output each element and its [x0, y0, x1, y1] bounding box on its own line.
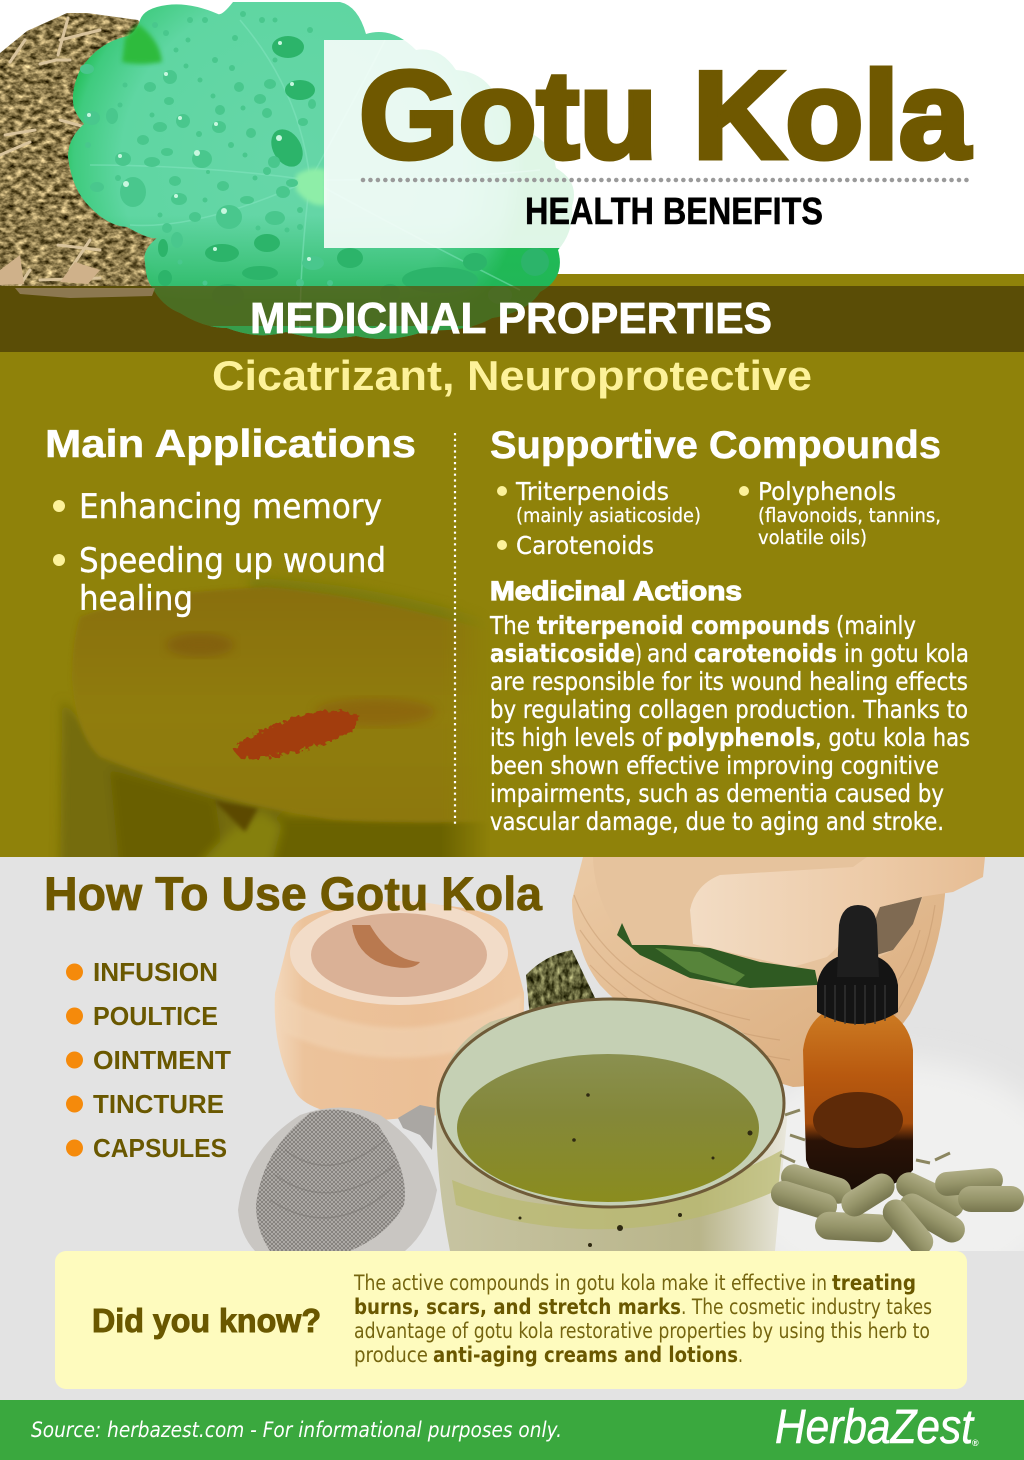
callout text: burns, scars, and stretch marks	[354, 1295, 681, 1319]
callout text: produce	[354, 1343, 428, 1367]
compound: triterpenoids: (mainly asiaticoside)	[516, 504, 701, 527]
callout text	[353, 1271, 932, 1367]
paragraph: medicinal actions: , gotu kola has	[815, 723, 970, 752]
paragraph: medicinal actions	[489, 611, 970, 836]
stick pile edge over band	[15, 288, 155, 298]
supportive compounds column	[489, 424, 970, 836]
heading: supportive compounds: Supportive Compounds	[490, 424, 941, 467]
heading: main applications: Main Applications	[45, 423, 416, 466]
callout text: .	[738, 1343, 743, 1367]
main applications column	[45, 423, 416, 619]
photo collage	[238, 857, 1024, 1300]
callout heading: Did you know?	[92, 1302, 321, 1339]
paragraph: medicinal actions: The	[489, 611, 530, 640]
form: infusion: INFUSION	[93, 957, 218, 987]
callout: did you know	[55, 1251, 967, 1389]
list item: wound healing	[53, 541, 386, 619]
form: ointment: OINTMENT	[93, 1045, 231, 1075]
image: wounded arm	[58, 577, 480, 857]
paragraph: medicinal actions: triterpenoid compounds	[537, 611, 830, 640]
footer	[0, 1400, 1024, 1460]
paragraph: medicinal actions: )	[635, 639, 642, 668]
form: poultice: POULTICE	[93, 1001, 218, 1031]
logo registered mark: ®	[972, 1438, 979, 1448]
image: tea strainer	[238, 1105, 437, 1251]
panel: how to use	[0, 857, 1024, 1400]
compound: polyphenols: (flavonoids, tannins,	[758, 504, 941, 527]
compound: polyphenols	[739, 477, 941, 549]
heading: how to use: How To Use Gotu Kola	[44, 867, 543, 920]
paragraph: medicinal actions: its high levels of	[490, 723, 663, 752]
image: jar of ointment	[275, 901, 524, 1120]
image: dried herb pile	[0, 13, 190, 300]
callout text: treating	[832, 1271, 916, 1295]
paragraph: medicinal actions: (mainly	[836, 611, 916, 640]
translucent title panel	[324, 40, 576, 248]
paragraph: medicinal actions: polyphenols	[667, 723, 815, 752]
form: capsules: CAPSULES	[93, 1133, 227, 1163]
list item: memory: Enhancing memory	[79, 487, 382, 527]
olive strip	[150, 274, 1024, 288]
compound: triterpenoids	[497, 477, 701, 527]
paragraph: medicinal actions: asiaticoside	[490, 639, 635, 668]
compound: triterpenoids: Triterpenoids	[515, 477, 669, 506]
panel: medicinal properties	[0, 286, 1024, 857]
compound: polyphenols: Polyphenols	[758, 477, 896, 506]
callout text: . The cosmetic industry takes	[681, 1295, 932, 1319]
callout text: anti-aging creams and lotions	[433, 1343, 738, 1367]
source note: Source: herbazest.com - For informational purposes only.	[31, 1418, 562, 1442]
compound: polyphenols: volatile oils)	[758, 526, 867, 549]
paragraph: medicinal actions: been shown effective improving cognitive	[490, 751, 939, 780]
list: forms of use	[66, 957, 231, 1163]
image: capsules	[771, 1164, 1024, 1251]
section heading: MEDICINAL PROPERTIES	[250, 294, 772, 343]
form: tincture: TINCTURE	[93, 1089, 224, 1119]
paragraph: medicinal actions: and	[647, 639, 688, 668]
paragraph: medicinal actions: impairments, such as dementia caused by	[490, 779, 944, 808]
paragraph: medicinal actions: vascular damage, due to aging and stroke.	[490, 807, 944, 836]
band	[0, 286, 1024, 352]
compound: carotenoids: Carotenoids	[516, 531, 654, 560]
dotted title rule	[363, 178, 967, 182]
properties subheading: Cicatrizant, Neuroprotective	[212, 352, 812, 399]
pale table glow	[775, 1066, 1024, 1251]
image: gotu kola leaf	[68, 2, 574, 339]
heading: medicinal actions: Medicinal Actions	[490, 576, 742, 606]
image: amber dropper bottle	[803, 905, 913, 1190]
paragraph: medicinal actions: carotenoids	[694, 639, 837, 668]
image: green tea cup	[436, 999, 787, 1251]
list item: wound healing: healing	[79, 579, 193, 619]
subtitle: HEALTH BENEFITS	[525, 191, 823, 233]
panel: header	[0, 2, 1024, 339]
paragraph: medicinal actions: in gotu kola	[844, 639, 969, 668]
image: dried herbs	[526, 950, 595, 1010]
leaf bottom over band	[210, 326, 472, 339]
grey background	[0, 857, 1024, 1400]
leaf showing through band	[151, 286, 549, 326]
title: Gotu Kola	[359, 47, 971, 185]
bits of herb on table	[780, 1110, 950, 1163]
image: wooden mortar and pestle	[572, 857, 985, 1087]
list item: wound healing: Speeding up wound	[79, 541, 386, 581]
paragraph: medicinal actions: by regulating collagen production. Thanks to	[490, 695, 968, 724]
olive background	[0, 286, 1024, 857]
callout text: The active compounds in gotu kola make it effective in	[353, 1271, 827, 1295]
column divider	[454, 433, 456, 826]
logo: HerbaZest: HerbaZest	[775, 1401, 974, 1454]
paragraph: medicinal actions: are responsible for its wound healing effects	[490, 667, 968, 696]
